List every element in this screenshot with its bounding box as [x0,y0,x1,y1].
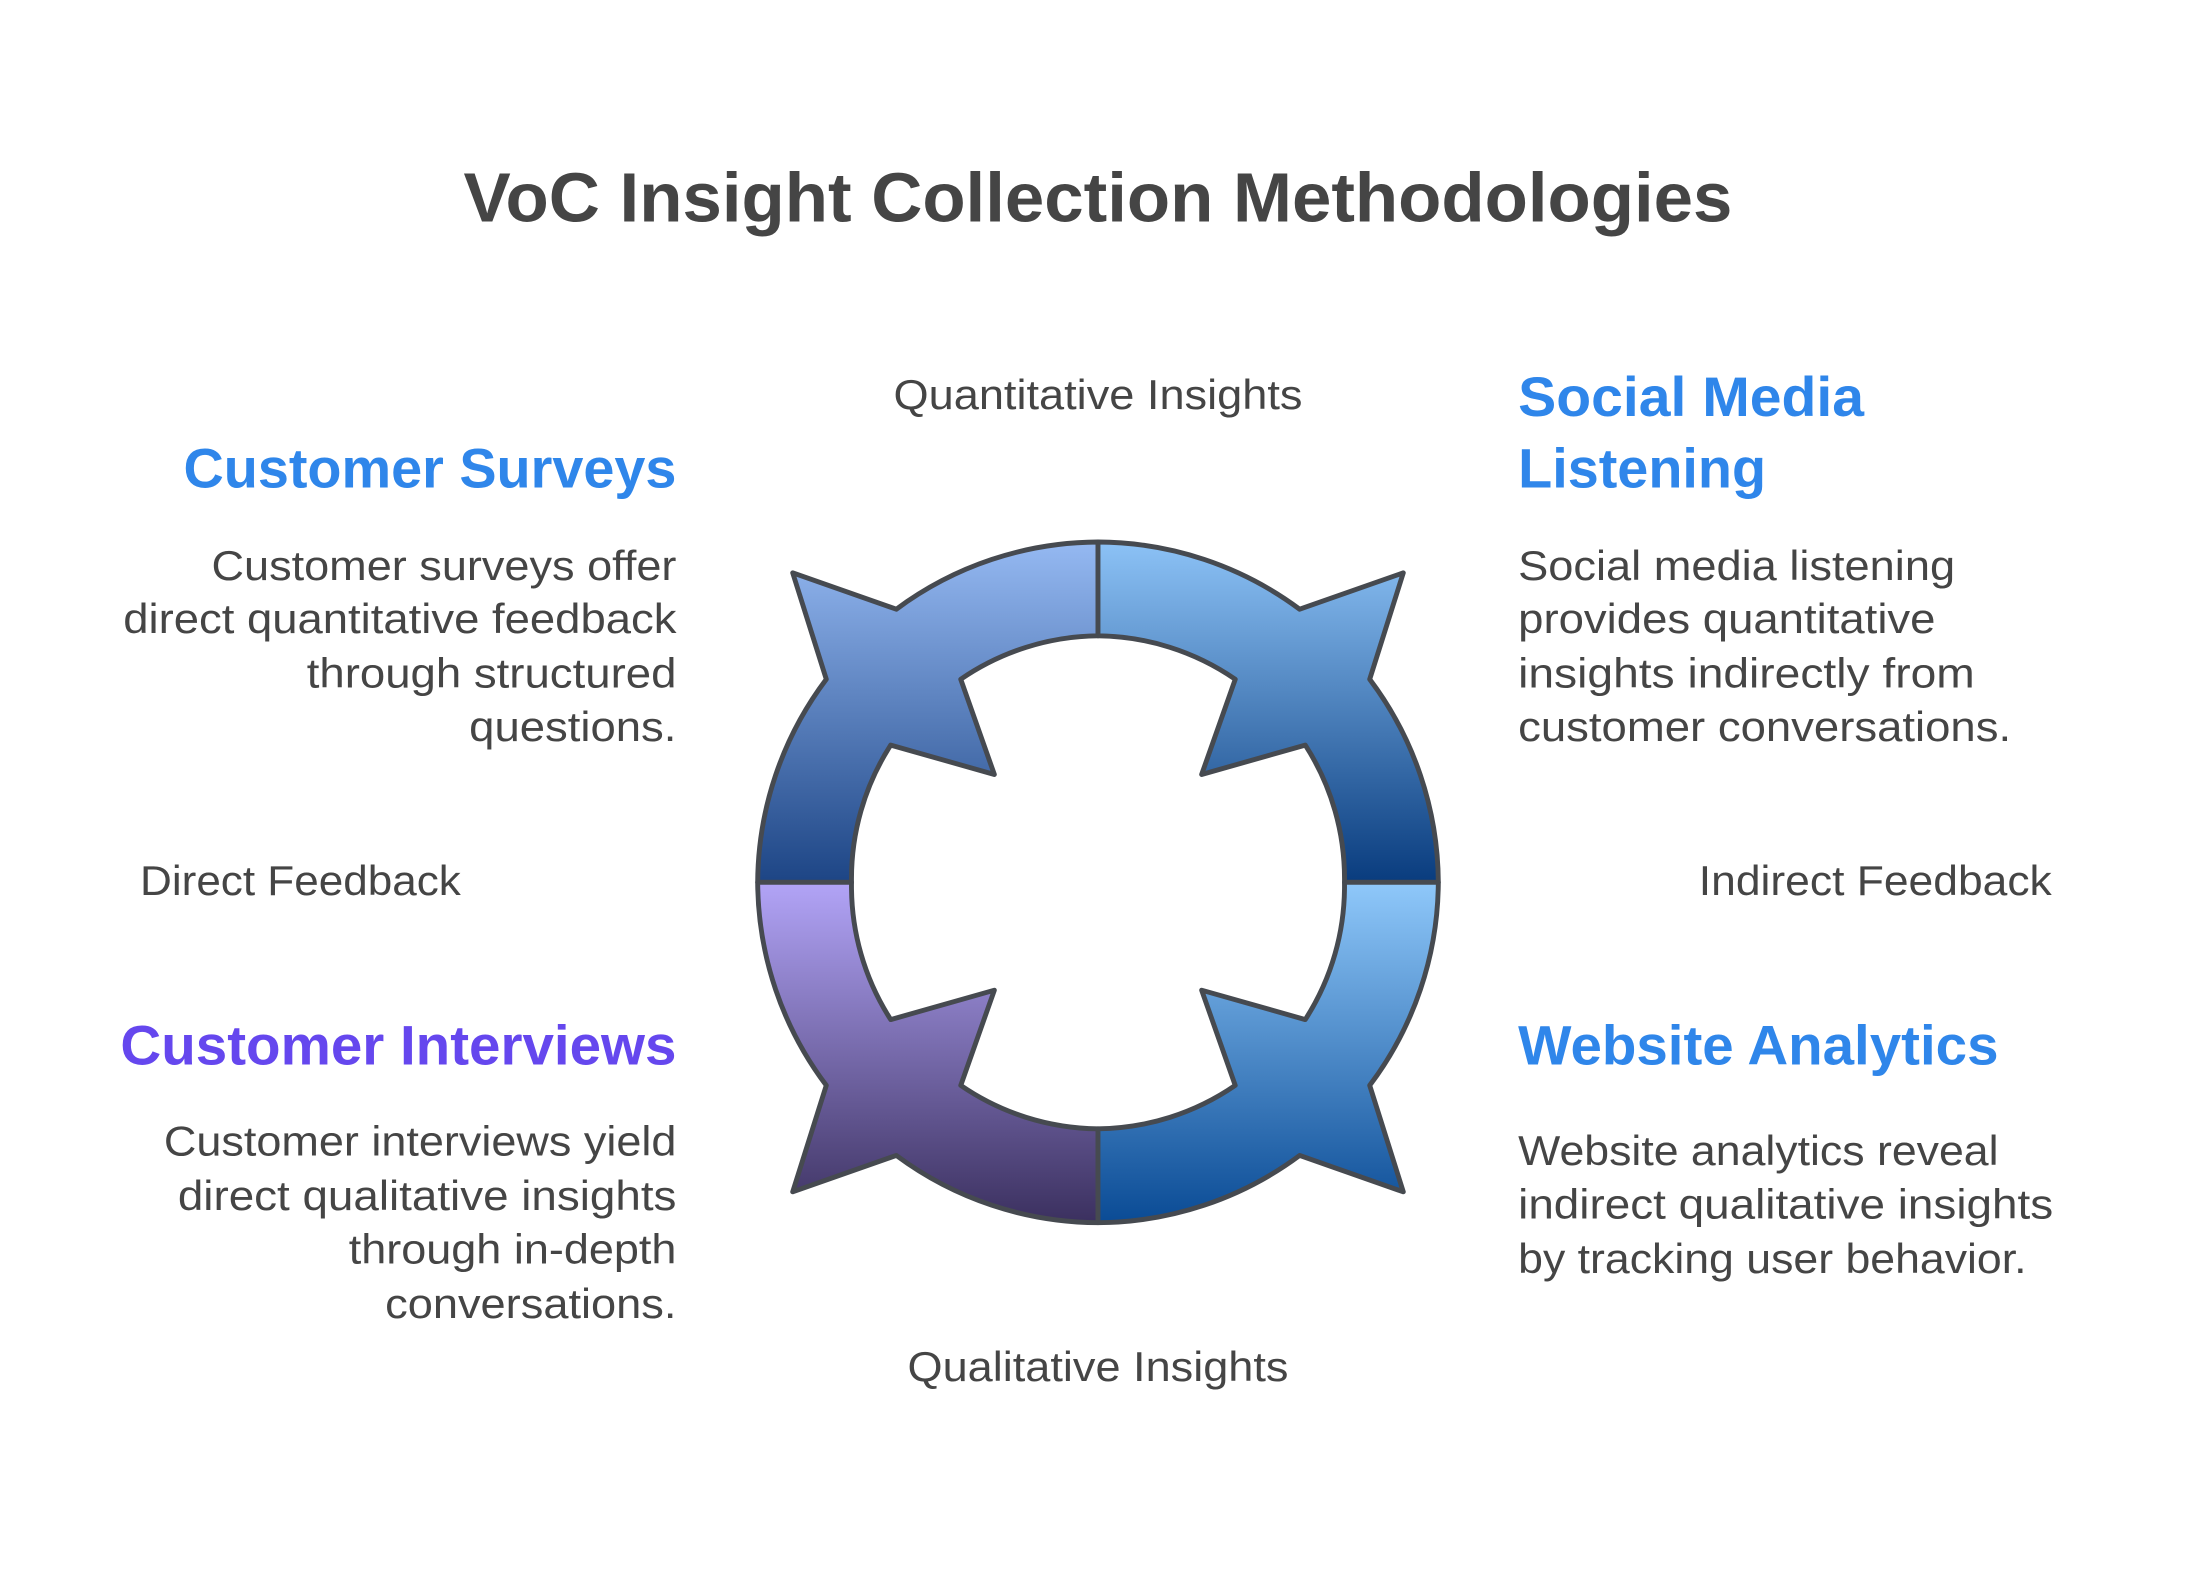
description: customer conversations. [1518,703,2011,750]
description: direct qualitative insights [178,1172,676,1219]
description: conversations. [385,1280,676,1327]
description: indirect qualitative insights [1518,1180,2053,1227]
axis label: top: Quantitative Insights [894,371,1302,418]
heading: Listening [1518,436,1766,499]
block: Website Analytics [1518,1013,2053,1282]
description: Customer surveys offer [211,542,676,589]
axis label: bottom: Qualitative Insights [908,1343,1288,1390]
segment: bottom-right (analytics) [1098,882,1438,1223]
diagram: ring of four arrows [758,542,1438,1223]
axis label: left: Direct Feedback [140,857,462,904]
description: questions. [469,703,676,750]
axis label: right: Indirect Feedback [1699,857,2053,904]
description [1518,542,2011,750]
block: Social Media Listening [1518,365,2011,750]
description [1518,1127,2053,1282]
description: direct quantitative feedback [123,595,678,642]
description [123,542,678,750]
description: Social media listening [1518,542,1955,589]
description: Customer interviews yield [164,1117,676,1164]
title: VoC Insight Collection Methodologies [464,158,1732,236]
description: by tracking user behavior. [1518,1235,2027,1282]
heading: Website Analytics [1518,1013,1999,1076]
block: Customer Surveys [123,436,678,750]
block: Customer Interviews [120,1013,676,1327]
description [164,1117,676,1327]
heading: Customer Surveys [183,436,676,499]
description: through structured [307,650,676,697]
heading: Social Media [1518,365,1865,428]
heading: Customer Interviews [120,1013,676,1076]
description: insights indirectly from [1518,650,1975,697]
description: through in-depth [349,1225,676,1272]
description: Website analytics reveal [1518,1127,1999,1174]
segment: top-right (social) [1098,542,1438,882]
description: provides quantitative [1518,595,1936,642]
segment: bottom-left (interviews) [758,882,1098,1223]
heading [1518,365,1865,499]
segment: top-left (surveys) [758,542,1098,882]
